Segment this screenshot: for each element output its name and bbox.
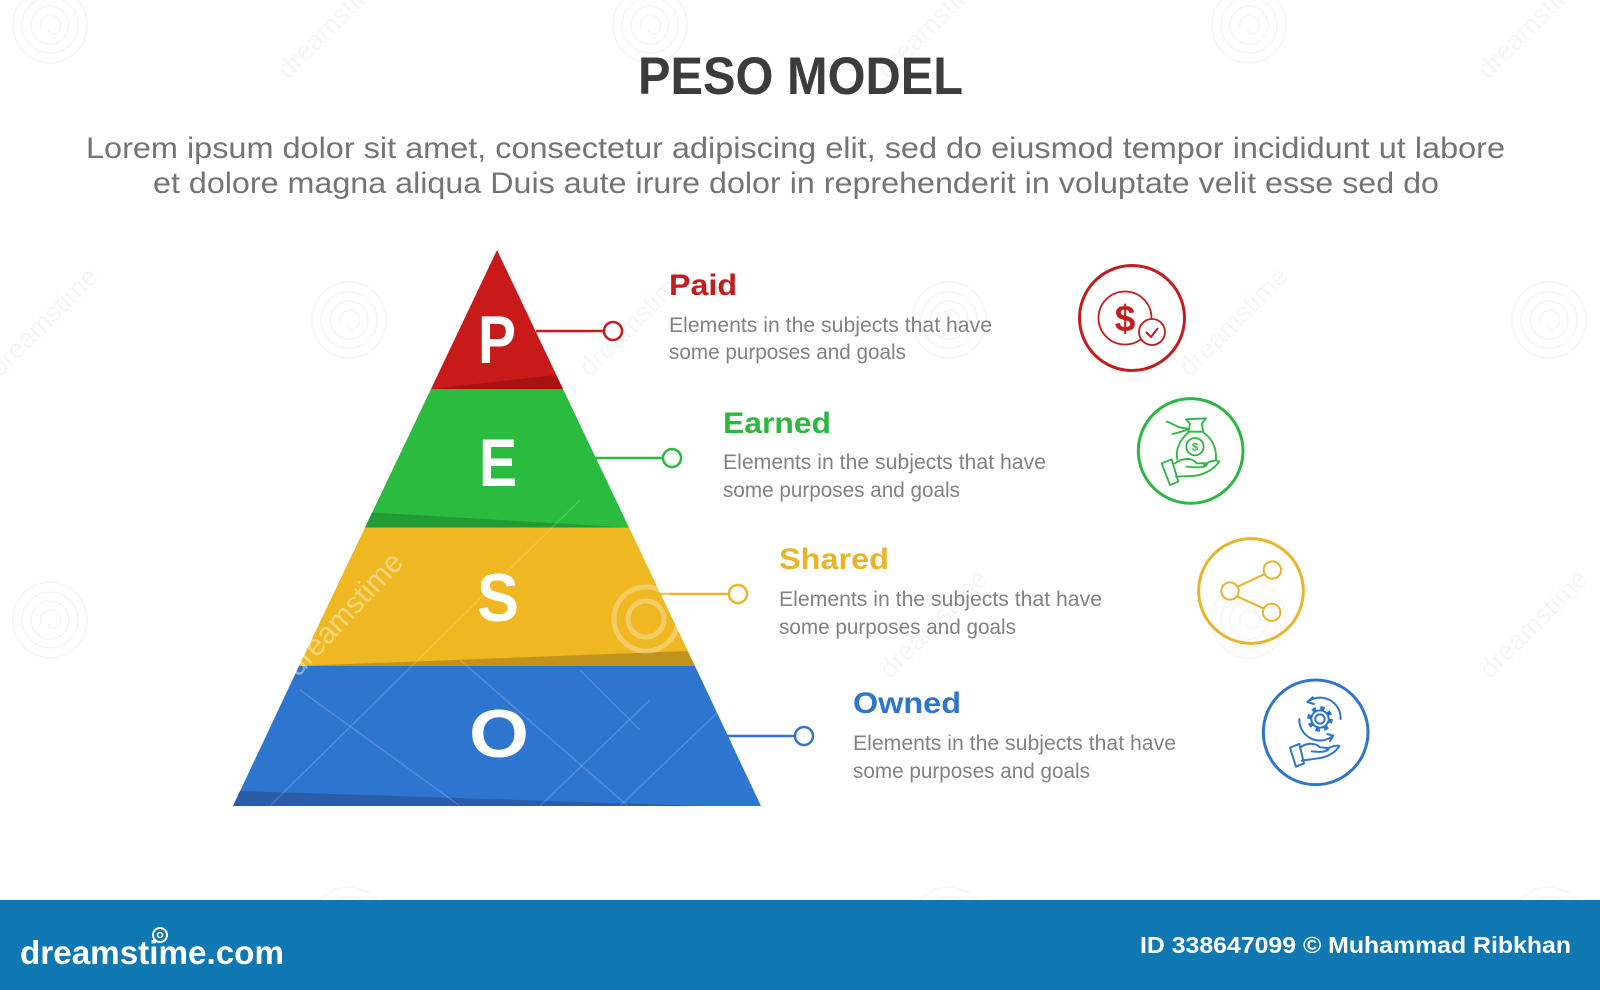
subtitle text	[86, 132, 1505, 200]
watermarks: dreamstime	[1473, 563, 1594, 684]
item: shared: Elements in the subjects that have	[779, 588, 1102, 611]
item: paid: some purposes and goals	[669, 341, 906, 364]
item: paid	[669, 269, 992, 364]
watermarks: dreamstime	[573, 261, 694, 382]
footer bar	[0, 900, 1600, 990]
item: owned	[853, 687, 1176, 783]
layer: shared: S	[477, 560, 519, 636]
layer: paid: P	[478, 302, 516, 378]
connector: shared	[658, 585, 747, 603]
watermark on pyramid: dreamstime	[279, 546, 410, 683]
footer credit: ID 338647099 © Muhammad Ribkhan	[1140, 932, 1571, 958]
icon: earned money bag on hand	[1138, 399, 1243, 503]
watermark on pyramid	[270, 500, 720, 860]
item: earned	[723, 407, 1046, 502]
icon: paid money check: $	[1115, 298, 1136, 339]
layer: owned: O	[469, 696, 529, 772]
watermarks: dreamstime	[873, 563, 994, 684]
item: owned: Elements in the subjects that have	[853, 732, 1176, 755]
connector: paid	[536, 322, 622, 340]
icon: owned gear on hand	[1263, 680, 1368, 785]
title: PESO MODEL	[638, 47, 963, 106]
layer: earned: E	[479, 425, 517, 501]
item: paid: Elements in the subjects that have	[669, 314, 992, 337]
subtitle text: et dolore magna aliqua Duis aute irure dolor in reprehenderit in voluptate velit esse sed do	[153, 167, 1439, 200]
layer: paid	[431, 250, 563, 389]
connector: earned	[595, 449, 681, 467]
item: owned: Owned	[853, 687, 961, 720]
item: owned: some purposes and goals	[853, 760, 1090, 783]
icon: shared nodes	[1199, 539, 1303, 643]
item: earned: Elements in the subjects that have	[723, 451, 1046, 474]
footer logo: dreamstime.com	[20, 934, 284, 971]
pyramid	[233, 250, 761, 860]
item: shared	[779, 543, 1102, 639]
icon: earned money bag on hand: $	[1192, 442, 1199, 454]
icon: paid money check	[1080, 266, 1184, 370]
item: shared: Shared	[779, 543, 889, 576]
subtitle text: Lorem ipsum dolor sit amet, consectetur adipiscing elit, sed do eiusmod tempor incididunt ut labore	[86, 132, 1505, 165]
item: paid: Paid	[669, 269, 737, 302]
item: earned: some purposes and goals	[723, 479, 960, 502]
item: earned: Earned	[723, 407, 831, 440]
item: shared: some purposes and goals	[779, 616, 1016, 639]
layer: owned	[233, 666, 761, 806]
layer: shared	[299, 528, 695, 666]
layer: earned	[365, 389, 629, 528]
connector: owned	[727, 727, 813, 745]
watermarks: dreamstime	[1173, 261, 1294, 382]
